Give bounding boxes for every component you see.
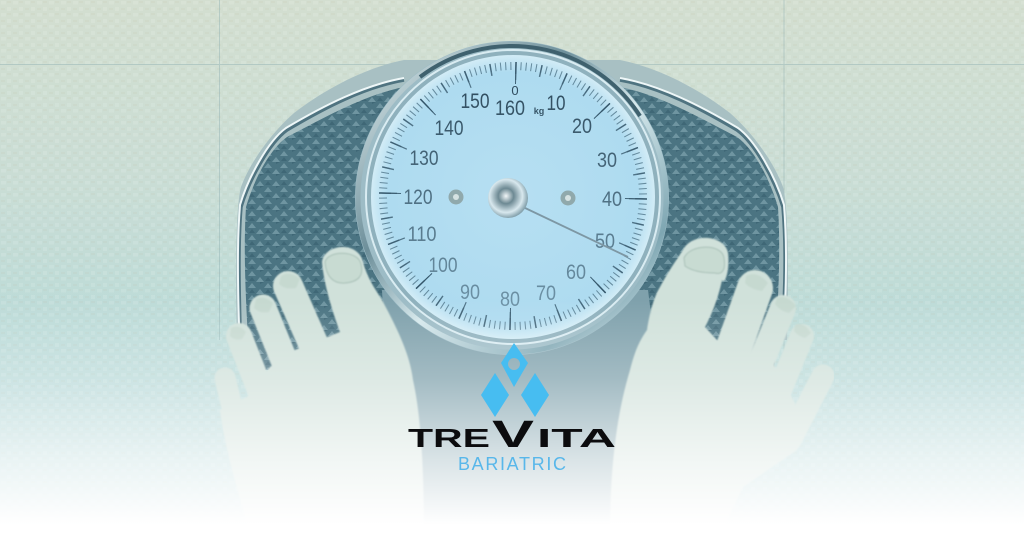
- dial numbers: 60: [566, 261, 586, 284]
- hub: [488, 178, 528, 218]
- dial numbers: 50: [595, 230, 615, 253]
- dial numbers: 80: [500, 288, 520, 311]
- logo: [408, 343, 616, 474]
- toenail: [325, 253, 362, 283]
- dial numbers: [404, 83, 622, 311]
- left foot: [220, 247, 424, 536]
- dial numbers: 100: [428, 254, 458, 277]
- white fade at bottom: [0, 300, 1024, 525]
- dial numbers: 90: [460, 281, 480, 304]
- textured rubber mat: [245, 87, 779, 370]
- needle: [523, 207, 628, 257]
- dial numbers: 70: [536, 282, 556, 305]
- smooth lower body: [382, 290, 652, 536]
- dial: [355, 41, 669, 355]
- rivets: [448, 190, 576, 206]
- chrome bezel: [355, 41, 669, 355]
- dial numbers: 10: [546, 92, 566, 115]
- dial numbers: kg: [534, 106, 544, 116]
- toes: [225, 286, 316, 440]
- toes: [733, 288, 823, 440]
- wordmark: TRE: [408, 423, 490, 453]
- dial numbers: 130: [410, 147, 438, 170]
- dial numbers: 120: [404, 186, 432, 209]
- dial numbers: 30: [597, 149, 617, 172]
- toenail: [684, 247, 725, 273]
- dial numbers: 160: [495, 97, 525, 120]
- dial numbers: 110: [408, 223, 436, 246]
- dial numbers: 20: [572, 115, 592, 138]
- dial numbers: 40: [602, 188, 622, 211]
- wordmark: [408, 414, 616, 456]
- dial numbers: 140: [434, 117, 464, 140]
- tagline: BARIATRIC: [458, 454, 566, 474]
- logo mark: three diamonds: [481, 343, 549, 417]
- dial face: [371, 55, 655, 339]
- dial numbers: 0: [511, 83, 519, 98]
- scale body: [236, 60, 788, 536]
- dial numbers: 150: [460, 90, 490, 113]
- tick marks: [380, 63, 646, 329]
- wordmark: V: [492, 414, 535, 456]
- chrome trim: [239, 80, 785, 325]
- right foot: [610, 238, 823, 536]
- wordmark: ITA: [537, 423, 616, 453]
